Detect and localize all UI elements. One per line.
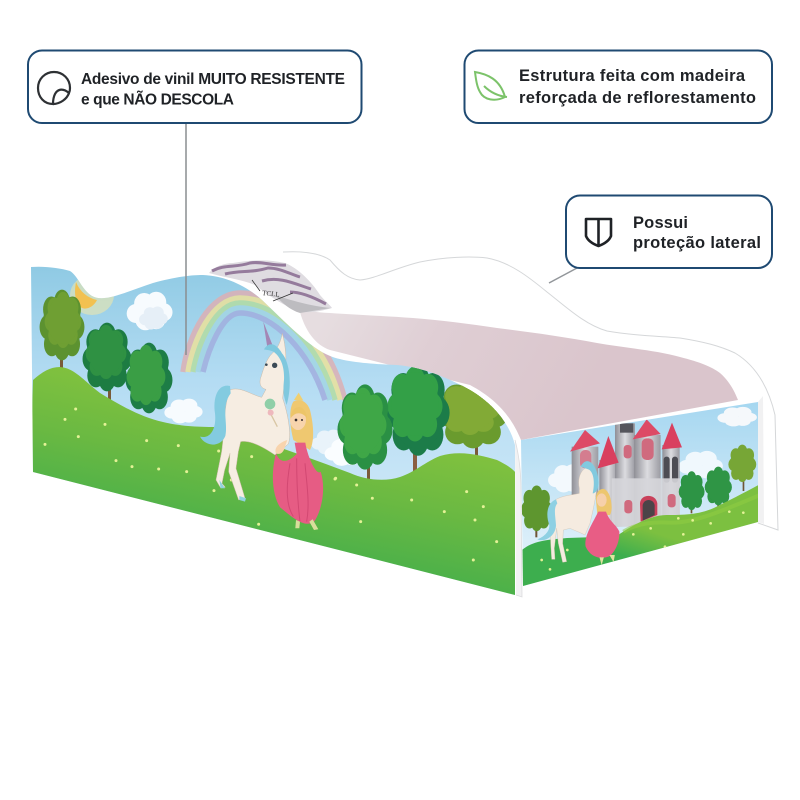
callout text: wood structure: reforçada de reflorestamento [519,89,756,107]
trees left [40,290,172,413]
icon: shield [586,219,611,246]
meadow flowers [43,407,337,526]
icon: leaf [475,72,507,100]
flowers front [540,510,745,571]
trees front [521,445,756,537]
panel: side illustration [25,260,525,605]
trees right [337,364,508,483]
leader line: adhesive [185,123,187,355]
sun [70,280,114,315]
bed frame outline [262,252,778,597]
callout: wood structure [464,50,772,123]
hills front [518,483,762,590]
callout text: wood structure: Estrutura feita com madeira [519,67,746,85]
grass hill [30,367,516,600]
castle [570,419,682,527]
icon: sticker [38,72,70,104]
clouds front [548,407,757,492]
callout: adhesive [28,50,362,123]
callout: side protection [566,196,772,268]
pillow [209,260,332,313]
pillow: TCLL [262,289,280,299]
callout text: side protection: Possui [633,214,688,232]
callout text: adhesive: e que NÃO DESCOLA [81,90,234,108]
princess front [585,489,619,563]
callout text: side protection: proteção lateral [633,234,761,252]
clouds [127,292,367,466]
rainbow [183,293,345,400]
unicorn [200,322,290,502]
mattress [300,311,738,440]
panel: front illustration [521,402,758,586]
princess [273,393,323,530]
callout text: adhesive: Adesivo de vinil MUITO RESISTENTE [81,71,345,88]
unicorn front [537,461,599,562]
leader line: side protection [549,268,577,283]
